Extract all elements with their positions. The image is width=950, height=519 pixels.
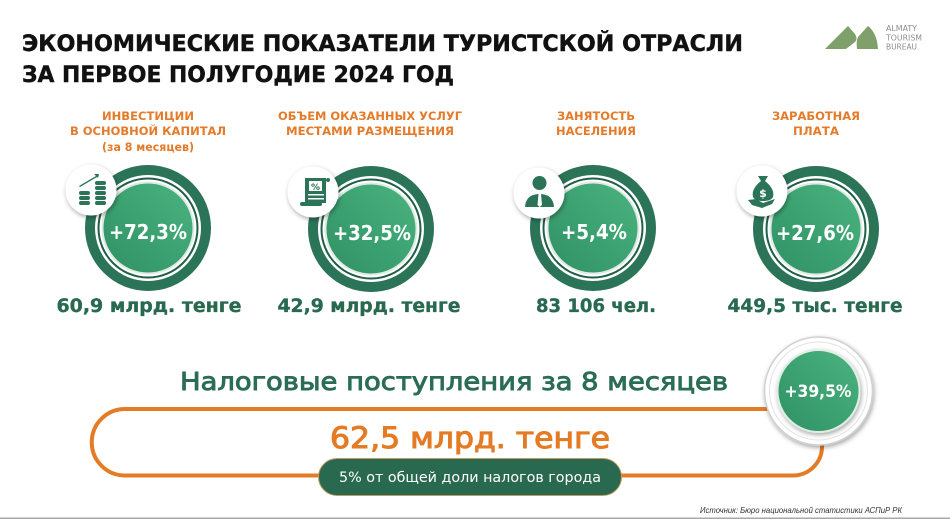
logo: Almaty Tourism Bureau: TOURISM: [885, 34, 922, 42]
title: ЗА ПЕРВОЕ ПОЛУГОДИЕ 2024 ГОД: [22, 62, 454, 88]
heading: wages: ЗАРАБОТНАЯ: [772, 109, 860, 123]
value: 62,5 млрд. тенге: 62,5 млрд. тенге: [330, 421, 610, 455]
value: 60,9 млрд. тенге: 60,9 млрд. тенге: [56, 295, 242, 317]
panel: investments: [56, 109, 242, 317]
logo: Almaty Tourism Bureau: ALMATY: [886, 24, 917, 33]
percent badge: +39,5%: +39,5%: [784, 382, 852, 402]
panel: employment: [514, 109, 656, 317]
icon: document with percent: [288, 166, 338, 218]
logo: Almaty Tourism Bureau: BUREAU: [886, 42, 917, 52]
icon: person with tie: [514, 168, 564, 218]
heading: wages: ПЛАТА: [793, 124, 839, 138]
logo: Almaty Tourism Bureau: [825, 24, 922, 52]
share label: [318, 458, 622, 496]
panel: wages: [728, 109, 902, 317]
icon: money bag in hand: $: [759, 187, 767, 200]
icon: money bag in hand: [736, 166, 788, 216]
heading: investments: [70, 109, 226, 154]
heading: tax revenue: Налоговые поступления за 8 месяцев: [180, 367, 728, 396]
percent circle: +32,5%: [308, 166, 434, 292]
heading: employment: НАСЕЛЕНИЯ: [556, 124, 636, 138]
percent circle: +27,6%: +27,6%: [776, 221, 854, 245]
percent circle: +72,3%: +72,3%: [109, 220, 187, 244]
panel: tax revenue: [92, 337, 873, 496]
orange rounded outline: [92, 409, 822, 476]
percent circle: +5,4%: +5,4%: [561, 220, 627, 244]
value: 83 106 чел.: 83 106 чел.: [536, 295, 656, 317]
icon: coins with growth arrow: [66, 164, 116, 216]
heading: services: ОБЪЕМ ОКАЗАННЫХ УСЛУГ: [278, 109, 463, 123]
percent circle: +32,5%: +32,5%: [333, 221, 411, 245]
percent badge: +39,5%: [764, 337, 872, 445]
share label: 5% от общей доли налогов города: [339, 470, 601, 486]
source note: Источник: Бюро национальной статистики АСПиР РК: [700, 506, 903, 515]
percent circle: +72,3%: [85, 165, 211, 291]
icon: document with percent: %: [311, 183, 320, 193]
heading: investments: (за 8 месяцев): [102, 140, 194, 154]
heading: employment: ЗАНЯТОСТЬ: [557, 109, 635, 123]
heading: employment: [556, 109, 636, 138]
panel: accommodation services: [278, 109, 463, 317]
heading: investments: В ОСНОВНОЙ КАПИТАЛ: [70, 123, 226, 138]
percent circle: +5,4%: [530, 165, 656, 291]
title: [22, 29, 743, 88]
title: ЭКОНОМИЧЕСКИЕ ПОКАЗАТЕЛИ ТУРИСТСКОЙ ОТРАСЛИ: [22, 29, 743, 57]
value: 449,5 тыс. тенге: 449,5 тыс. тенге: [728, 295, 902, 317]
heading: services: [278, 109, 463, 138]
percent circle: +27,6%: [753, 166, 879, 292]
heading: services: МЕСТАМИ РАЗМЕЩЕНИЯ: [286, 124, 454, 138]
value: 42,9 млрд. тенге: 42,9 млрд. тенге: [278, 295, 460, 317]
heading: wages: [772, 109, 860, 138]
heading: investments: ИНВЕСТИЦИИ: [102, 109, 194, 123]
